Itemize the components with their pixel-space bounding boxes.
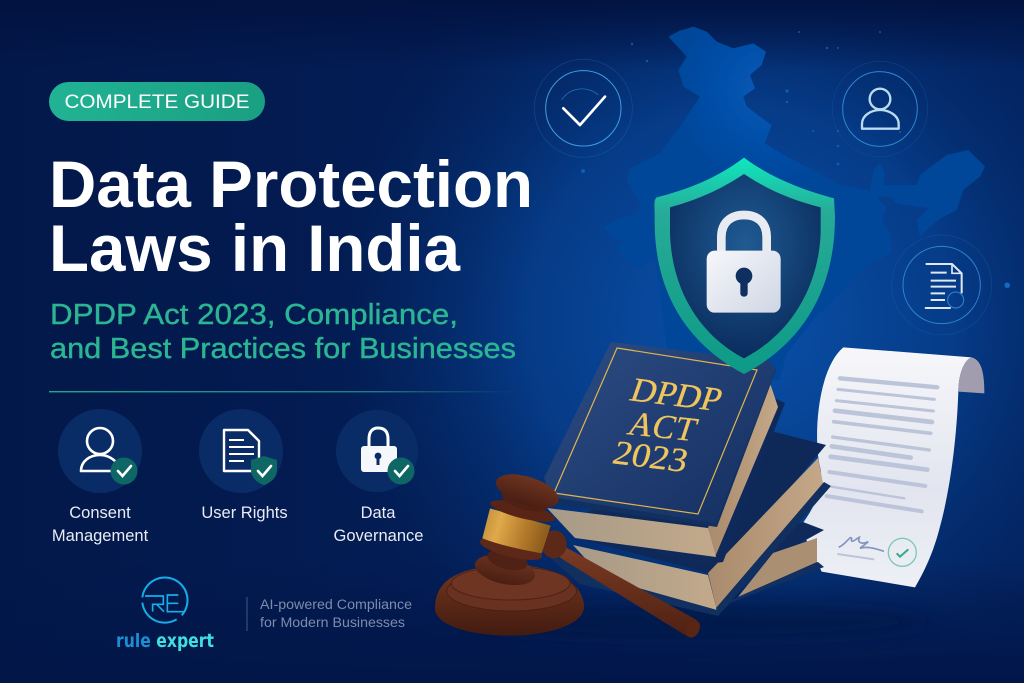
floor shadow — [470, 604, 930, 640]
book title: 2023 — [609, 435, 692, 480]
feature: data governance: Governance — [334, 527, 423, 545]
hud icon: check mark — [534, 59, 632, 157]
tagline — [260, 597, 412, 630]
book title: ACT — [624, 405, 702, 449]
title: Laws in India — [49, 211, 461, 285]
padlock — [707, 215, 781, 313]
badge: complete guide: COMPLETE GUIDE — [64, 92, 249, 113]
feature: user rights — [199, 409, 288, 522]
subtitle: and Best Practices for Businesses — [50, 333, 516, 365]
gavel base — [435, 565, 584, 636]
title — [49, 147, 533, 285]
top book — [544, 342, 785, 565]
feature: consent management: Consent — [69, 504, 131, 522]
gavel — [435, 468, 703, 640]
feature: data governance — [334, 410, 423, 545]
feature: user rights: User Rights — [201, 504, 288, 522]
gavel handle — [541, 530, 703, 640]
bottom book — [547, 522, 824, 616]
feature: consent management — [52, 409, 149, 545]
subtitle: DPDP Act 2023, Compliance, — [50, 299, 458, 331]
middle book — [573, 432, 831, 616]
book title: DPDP — [625, 371, 727, 419]
map of India — [603, 27, 985, 380]
stacked books — [544, 342, 831, 616]
paper document — [800, 347, 984, 587]
divider — [49, 391, 519, 392]
shield face — [670, 174, 821, 358]
hud icon: person — [832, 61, 928, 157]
badge: complete guide — [49, 82, 265, 121]
shield with padlock — [654, 158, 835, 374]
network dots — [581, 31, 1010, 288]
shield frame — [654, 158, 835, 374]
tagline: AI-powered Compliance — [260, 597, 412, 612]
feature: consent management: Management — [52, 527, 149, 545]
tagline: for Modern Businesses — [260, 615, 405, 630]
subtitle — [50, 299, 516, 365]
logo separator — [246, 597, 248, 631]
logo: rule expert — [116, 577, 214, 652]
title: Data Protection — [49, 147, 533, 221]
feature: data governance: Data — [361, 504, 396, 522]
gavel head — [472, 468, 563, 590]
signature and seal — [837, 537, 916, 566]
logo: rule expert: rule expert — [116, 630, 214, 652]
hud icon: document — [892, 235, 1010, 335]
book title — [609, 371, 727, 480]
